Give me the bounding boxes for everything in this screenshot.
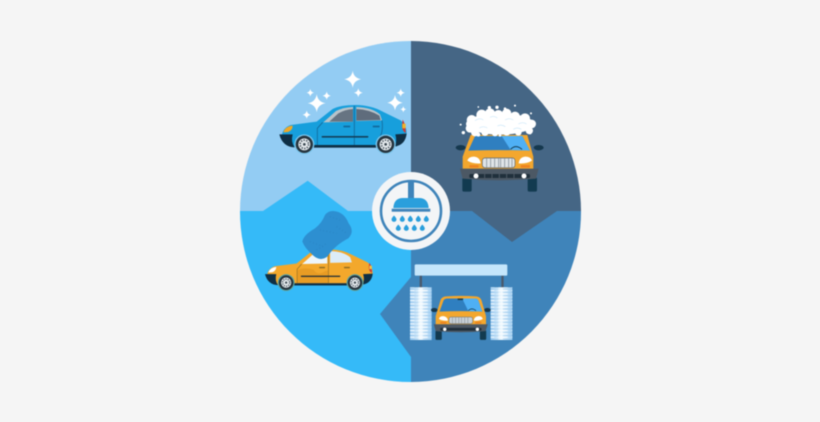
icon: shower badge (372, 172, 450, 250)
gantry posts (420, 276, 504, 288)
car: orange front view in wash (431, 296, 491, 340)
icon: water drops (392, 216, 429, 231)
gantry top bar (415, 264, 507, 276)
arrow: pointer into bottom left quadrant (380, 277, 411, 357)
car wash gantry (410, 264, 512, 340)
side mirrors (431, 308, 491, 312)
wheels (435, 330, 442, 340)
icon: sparkles around clean car (302, 71, 406, 119)
tyres (462, 177, 472, 192)
arrow: pointer into bottom right quadrant (472, 211, 557, 242)
quadrant: bottom left bright blue (240, 211, 411, 382)
quadrant: bottom right steel blue (411, 211, 581, 382)
car: front view covered in foam (456, 105, 544, 192)
quadrant: top right slate (411, 41, 581, 211)
quadrant: top left light blue (240, 41, 411, 211)
icon: sponge (302, 211, 352, 259)
left brush (410, 287, 432, 340)
right brush (491, 287, 512, 340)
foam on roof (460, 105, 536, 137)
icon: side mirrors (456, 145, 544, 150)
foam shading (475, 116, 527, 129)
car: clean blue side view (279, 105, 407, 154)
car: orange side view being sponged (265, 249, 373, 291)
arrow: pointer into top left quadrant (263, 181, 348, 211)
